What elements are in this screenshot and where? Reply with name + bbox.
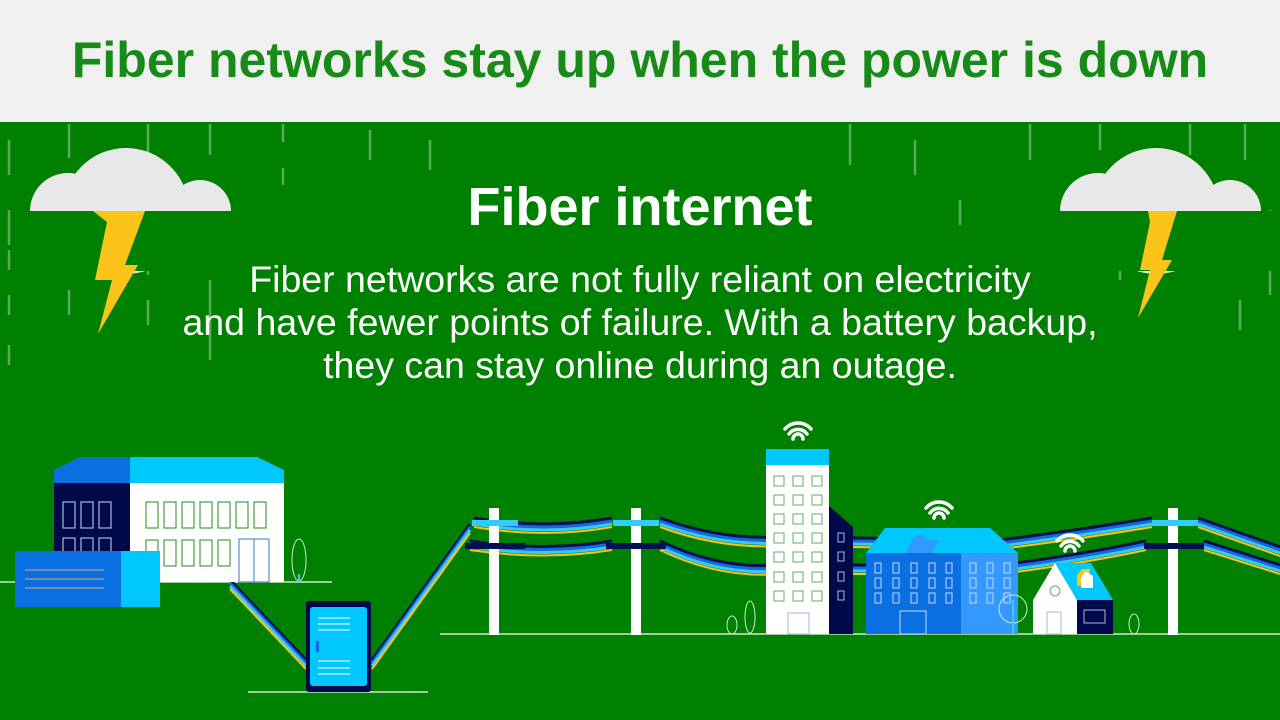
apartment tower	[727, 449, 853, 634]
house	[1033, 563, 1139, 634]
body text	[182, 258, 1098, 386]
subheading: Fiber internet	[467, 177, 813, 237]
fiber cables	[230, 518, 1280, 669]
body text: they can stay online during an outage.	[323, 344, 957, 386]
title: Fiber networks stay up when the power is down	[72, 32, 1208, 88]
ground lines	[0, 582, 1280, 692]
blue apartment block	[866, 528, 1027, 634]
body text: Fiber networks are not fully reliant on electricity	[249, 258, 1031, 300]
body text: and have fewer points of failure. With a battery backup,	[182, 301, 1098, 343]
school building	[15, 457, 306, 607]
fiber cabinet	[306, 601, 371, 692]
cloud left	[20, 148, 260, 274]
utility poles	[465, 508, 1204, 635]
lightning left	[93, 211, 145, 334]
wifi icons	[785, 423, 1083, 551]
cloud right	[1050, 148, 1280, 274]
lightning right	[1138, 211, 1177, 318]
header bar	[0, 0, 1280, 122]
